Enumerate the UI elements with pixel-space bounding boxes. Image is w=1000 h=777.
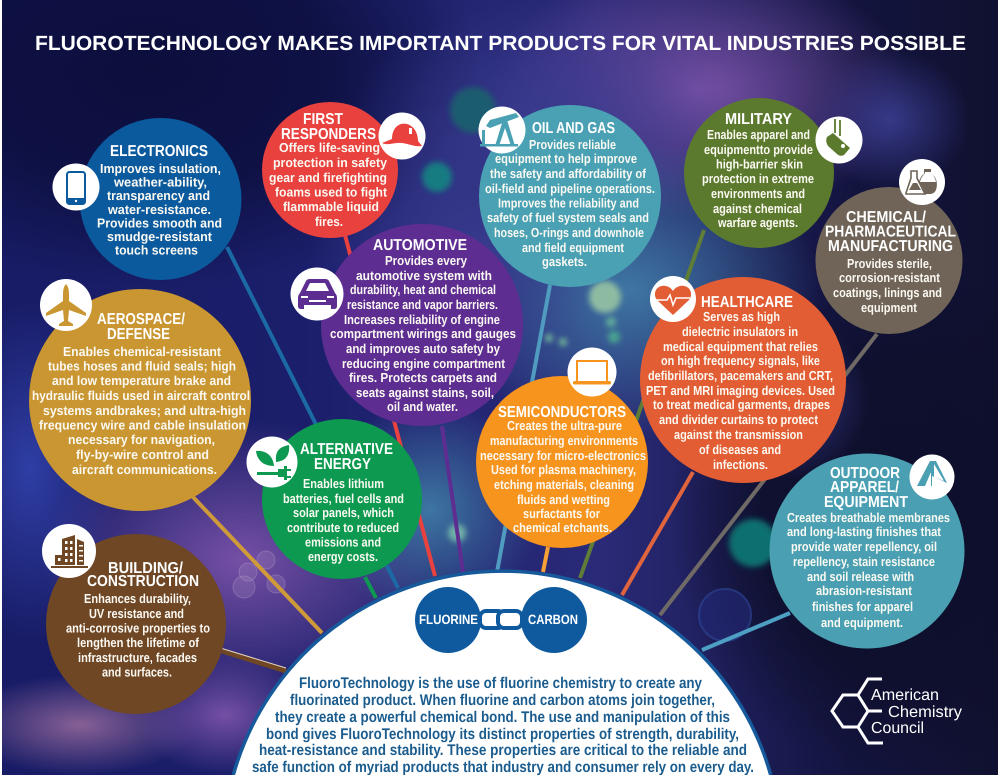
description text: they create a powerful chemical bond. The use and manipulation of this	[275, 709, 730, 726]
text: chemical pharmaceutical manufacturing: Provides sterile,	[847, 256, 932, 271]
logo: American Chemistry Council: American	[871, 687, 939, 704]
text: automotive: seats against stains, soil,	[356, 385, 494, 400]
text: electronics: transparency and	[107, 188, 210, 203]
heading: chemical pharmaceutical manufacturing: PHARMACEUTICAL	[825, 224, 956, 240]
text: first responders: Offers life-saving	[279, 140, 380, 155]
text: automotive: Provides every	[385, 253, 468, 268]
text: electronics	[97, 161, 222, 258]
text: first responders: flammable liquid	[283, 199, 379, 214]
text: outdoor apparel equipment: finishes for apparel	[812, 599, 913, 614]
text: alternative energy	[283, 476, 404, 564]
logo: American Chemistry Council: Council	[871, 720, 924, 737]
text: healthcare: of diseases and	[699, 442, 781, 457]
text: oil and gas: and field equipment	[522, 240, 625, 255]
text: oil and gas: oil-field and pipeline operations.	[485, 181, 655, 196]
text: healthcare: PET and MRI imaging devices. Used	[646, 383, 835, 398]
description text: FluoroTechnology is the use of fluorine chemistry to create any	[299, 675, 702, 692]
panel: first responders	[262, 102, 426, 238]
text: aerospace defense: fly-by-wire control and	[76, 447, 209, 462]
heading: first responders	[282, 113, 376, 140]
heading: building construction: BUILDING/	[108, 560, 184, 577]
logo: American Chemistry Council	[832, 679, 962, 743]
heading: automotive: AUTOMOTIVE	[373, 237, 467, 254]
text: oil and gas: safety of fuel system seals and	[487, 210, 649, 225]
icon: tent	[910, 454, 954, 500]
description text: safe function of myriad products that industry and consumer rely on every day.	[252, 759, 754, 776]
text: aerospace defense: tubes hoses and fluid seals; high	[48, 359, 236, 374]
icon: fire helmet	[378, 112, 426, 160]
text: alternative energy: contribute to reduced	[287, 520, 399, 535]
text: automotive: fires. Protects carpets and	[349, 370, 497, 385]
text: aerospace defense: systems andbrakes; and ultra-high	[43, 403, 246, 418]
text: semiconductors: fluids and wetting	[517, 492, 610, 507]
panel: healthcare	[640, 276, 846, 483]
heading: aerospace defense	[97, 312, 185, 340]
text: outdoor apparel equipment: provide water repellency, oil	[791, 539, 937, 554]
heading: chemical pharmaceutical manufacturing: MANUFACTURING	[828, 238, 953, 255]
text: electronics: Improves insulation,	[100, 161, 221, 176]
description text: bond gives FluoroTechnology its distinct properties of strength, durability,	[266, 726, 739, 743]
panel: military	[684, 98, 862, 248]
panel: alternative energy	[246, 419, 422, 579]
chain: fluorine and carbon circles	[415, 587, 587, 653]
heading: first responders: RESPONDERS	[281, 126, 376, 143]
logo: American Chemistry Council: Chemistry	[888, 704, 962, 721]
text: aerospace defense: frequency wire and cable insulation	[39, 418, 246, 432]
text: semiconductors: manufacturing environments	[490, 433, 638, 448]
text: oil and gas: gaskets.	[542, 254, 587, 269]
text: automotive: automotive system with	[356, 268, 492, 283]
text: automotive	[330, 253, 516, 414]
heading: chemical pharmaceutical manufacturing	[826, 210, 956, 252]
text: building construction: lengthen the lifetime of	[77, 635, 200, 650]
text: chemical pharmaceutical manufacturing: coatings, linings and	[833, 285, 942, 300]
text: aerospace defense: and low temperature brake and	[52, 373, 231, 388]
heading: outdoor apparel equipment	[824, 465, 908, 511]
text: first responders	[269, 140, 388, 229]
heading: healthcare: HEALTHCARE	[701, 294, 793, 311]
heading: building construction: CONSTRUCTION	[87, 573, 199, 590]
text: military: protection in extreme	[702, 171, 814, 186]
text: building construction: Enhances durability,	[84, 591, 191, 606]
text: military: high-barrier skin	[716, 156, 803, 172]
text: outdoor apparel equipment: repellency, stain resistance	[793, 554, 935, 569]
heading: military: MILITARY	[725, 111, 792, 128]
text: semiconductors: Used for plasma machinery,	[491, 462, 636, 477]
text: first responders: protection in safety	[273, 155, 388, 170]
heading: building construction	[88, 562, 198, 586]
panel: aerospace defense	[29, 279, 251, 511]
text: building construction: infrastructure, facades	[78, 650, 197, 665]
text: building construction	[66, 591, 210, 680]
text: automotive: resistance and vapor barriers.	[347, 297, 498, 312]
text: semiconductors: etching materials, cleaning	[494, 477, 634, 492]
heading: semiconductors: SEMICONDUCTORS	[498, 404, 626, 421]
text: military: environments and	[711, 186, 805, 201]
heading: alternative energy: ENERGY	[314, 456, 371, 473]
text: military	[702, 127, 814, 230]
panel: outdoor apparel equipment	[770, 454, 964, 648]
text: healthcare: medical equipment that relies	[663, 339, 818, 354]
text: electronics: weather-ability,	[113, 174, 207, 190]
text: first responders: fires.	[315, 214, 343, 229]
connector lines	[193, 230, 877, 671]
text: automotive: compartment wirings and gauges	[330, 326, 516, 341]
text: healthcare: dielectric insulators in	[682, 324, 798, 339]
icon: airplane	[40, 279, 92, 331]
text: healthcare: defibrillators, pacemakers and CRT,	[648, 368, 833, 383]
description text: fluorinated product. When fluorine and carbon atoms join together,	[290, 692, 715, 709]
text: outdoor apparel equipment: and equipment.	[821, 615, 903, 630]
panel: oil and gas	[478, 105, 661, 287]
text: alternative energy: energy costs.	[308, 549, 378, 564]
text: oil and gas	[485, 137, 655, 269]
text: aerospace defense: necessary for navigation,	[68, 432, 215, 447]
text: oil and gas: Improves the reliability and	[498, 196, 639, 210]
text: healthcare: Serves as high	[703, 309, 780, 324]
text: automotive: oil and water.	[387, 399, 458, 414]
text: healthcare: infections.	[713, 457, 768, 472]
text: automotive: reducing engine compartment	[342, 356, 506, 371]
text: semiconductors: chemical etchants.	[513, 520, 612, 535]
text: healthcare	[646, 309, 835, 472]
text: outdoor apparel equipment	[787, 510, 950, 630]
icon: heart with pulse	[650, 276, 696, 322]
icon: leaf and plug	[246, 436, 298, 488]
text: alternative energy: emissions and	[305, 534, 381, 550]
text: electronics: smudge-resistant	[107, 229, 213, 244]
text: building construction: UV resistance and	[89, 606, 184, 621]
text: oil and gas: Provides reliable	[529, 137, 616, 152]
heading: electronics: ELECTRONICS	[110, 143, 208, 160]
chain: fluorine and carbon circles: CARBON	[528, 612, 578, 627]
icon: office building	[42, 524, 96, 578]
title: FLUOROTECHNOLOGY MAKES IMPORTANT PRODUCTS FOR VITAL INDUSTRIES POSSIBLE	[35, 32, 966, 55]
text: chemical pharmaceutical manufacturing	[833, 256, 942, 315]
text: automotive: and improves auto safety by	[346, 341, 501, 356]
icon: laptop	[568, 348, 616, 396]
icon: tablet	[52, 164, 100, 210]
chain: fluorine and carbon circles: FLUORINE	[419, 612, 478, 627]
text: alternative energy: batteries, fuel cells and	[283, 491, 404, 506]
text: alternative energy: solar panels, which	[293, 505, 394, 520]
icon: dog tag	[816, 116, 862, 164]
panel: automotive	[290, 224, 523, 426]
text: outdoor apparel equipment: and long-lasting finishes that	[787, 524, 942, 539]
text: first responders: foams used to fight	[275, 184, 388, 200]
text: military: Enables apparel and	[707, 127, 810, 142]
text: healthcare: and divider curtains to protect	[659, 412, 819, 427]
text: aerospace defense: hydraulic fluids used in aircraft control	[32, 388, 250, 403]
text: chemical pharmaceutical manufacturing: equipment	[861, 300, 918, 315]
text: aerospace defense: Enables chemical-resistant	[63, 344, 222, 359]
text: oil and gas: hoses, O-rings and downhole	[494, 225, 644, 240]
text: oil and gas: the safety and affordability of	[490, 166, 647, 181]
text: first responders: gear and firefighting	[269, 170, 387, 185]
text: oil and gas: equipment to help improve	[495, 151, 637, 166]
text: outdoor apparel equipment: and soil release with	[807, 569, 914, 584]
text: aerospace defense: aircraft communications.	[72, 462, 217, 477]
text: semiconductors: surfactants for	[523, 506, 600, 521]
heading: chemical pharmaceutical manufacturing: CHEMICAL/	[846, 209, 927, 226]
text: outdoor apparel equipment: Creates breathable membranes	[787, 510, 950, 525]
heading: first responders: FIRST	[303, 111, 343, 128]
heading: alternative energy	[300, 443, 393, 470]
heading: aerospace defense: AEROSPACE/	[97, 311, 186, 328]
icon: car	[290, 268, 344, 320]
description text	[252, 675, 754, 776]
icon: oil pump	[478, 106, 526, 154]
panel: semiconductors	[476, 348, 648, 548]
text: semiconductors: necessary for micro-electronics	[480, 448, 646, 463]
panel: chemical pharmaceutical manufacturing	[816, 159, 962, 334]
text: electronics: touch screens	[115, 242, 198, 258]
text: electronics: water-resistance.	[107, 202, 211, 217]
text: healthcare: on high frequency signals, like	[661, 353, 820, 368]
heading: outdoor apparel equipment: APPAREL/	[830, 479, 900, 496]
bottom white semicircle panel	[233, 571, 771, 776]
text: military: equipmentto provide	[704, 142, 813, 157]
text: semiconductors	[480, 418, 646, 535]
heading: alternative energy: ALTERNATIVE	[300, 441, 393, 458]
panel: building construction	[42, 524, 226, 714]
heading: aerospace defense: DEFENSE	[107, 326, 170, 343]
heading: outdoor apparel equipment: EQUIPMENT	[824, 494, 908, 511]
text: military: warfare agents.	[717, 215, 798, 230]
text: alternative energy: Enables lithium	[303, 476, 384, 491]
text: automotive: Increases reliability of engine	[344, 312, 500, 327]
description text: heat-resistance and stability. These properties are critical to the reliable and	[259, 742, 747, 759]
text: chemical pharmaceutical manufacturing: corrosion-resistant	[839, 270, 941, 285]
text: building construction: and surfaces.	[102, 664, 172, 680]
text: healthcare: to treat medical garments, drapes	[653, 397, 830, 412]
text: semiconductors: Creates the ultra-pure	[507, 418, 622, 433]
text: building construction: anti-corrosive properties to	[66, 620, 210, 636]
text: healthcare: against the transmission	[674, 427, 803, 442]
text: military: against chemical	[713, 201, 802, 216]
text: aerospace defense	[32, 344, 250, 477]
text: automotive: durability, heat and chemical	[350, 282, 496, 297]
icon: flasks	[899, 159, 945, 205]
heading: oil and gas: OIL AND GAS	[532, 120, 615, 137]
heading: outdoor apparel equipment: OUTDOOR	[830, 465, 901, 482]
text: electronics: Provides smooth and	[97, 216, 222, 230]
text: outdoor apparel equipment: abrasion-resistant	[816, 583, 913, 598]
panel: electronics	[52, 118, 242, 280]
